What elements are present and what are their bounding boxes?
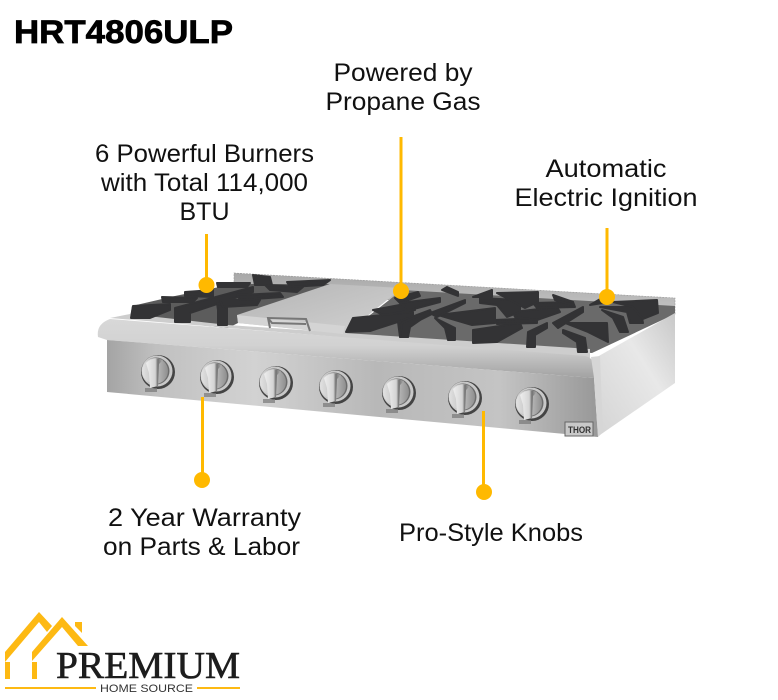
callout line: knobs [476,411,492,500]
label: burners: 6 Powerful Burners [95,140,314,168]
front lip surface [110,314,590,358]
THOR badge [565,422,593,436]
right burner grates [346,287,658,352]
left burner well [130,284,330,328]
left burner grates [131,275,330,325]
label: burners: with Total 114,000 [100,169,308,197]
logo subtitle: HOME SOURCE [100,683,193,695]
logo wordmark: PREMIUM [56,645,240,687]
THOR badge: THOR [568,425,591,435]
logo rule left [5,687,96,689]
right burner well [343,290,675,353]
icon: house roofs [5,612,88,679]
control knobs [141,355,549,424]
callout line: burners [198,234,214,293]
front rail [98,319,595,378]
callout line: warranty [194,397,210,488]
label: electric ignition: Electric Ignition [514,184,698,212]
label: burners: BTU [180,198,230,226]
logo: Premium Home Source [5,612,240,695]
label: electric ignition: Automatic [546,155,666,183]
label: knobs: Pro-Style Knobs [399,519,583,547]
callout line: ignition [599,228,615,305]
label: warranty: on Parts & Labor [103,533,300,561]
title: HRT4806ULP [14,14,233,50]
callout line: propane [393,137,409,299]
label: propane gas: Propane Gas [326,88,480,116]
logo rule right [197,687,240,689]
label: propane gas: Powered by [334,59,473,87]
cooktop illustration [98,273,675,437]
back wall [234,273,675,314]
griddle handle [268,318,310,331]
griddle plate [237,284,402,334]
control panel [107,340,598,437]
side panel [597,313,675,437]
label: warranty: 2 Year Warranty [108,504,302,532]
